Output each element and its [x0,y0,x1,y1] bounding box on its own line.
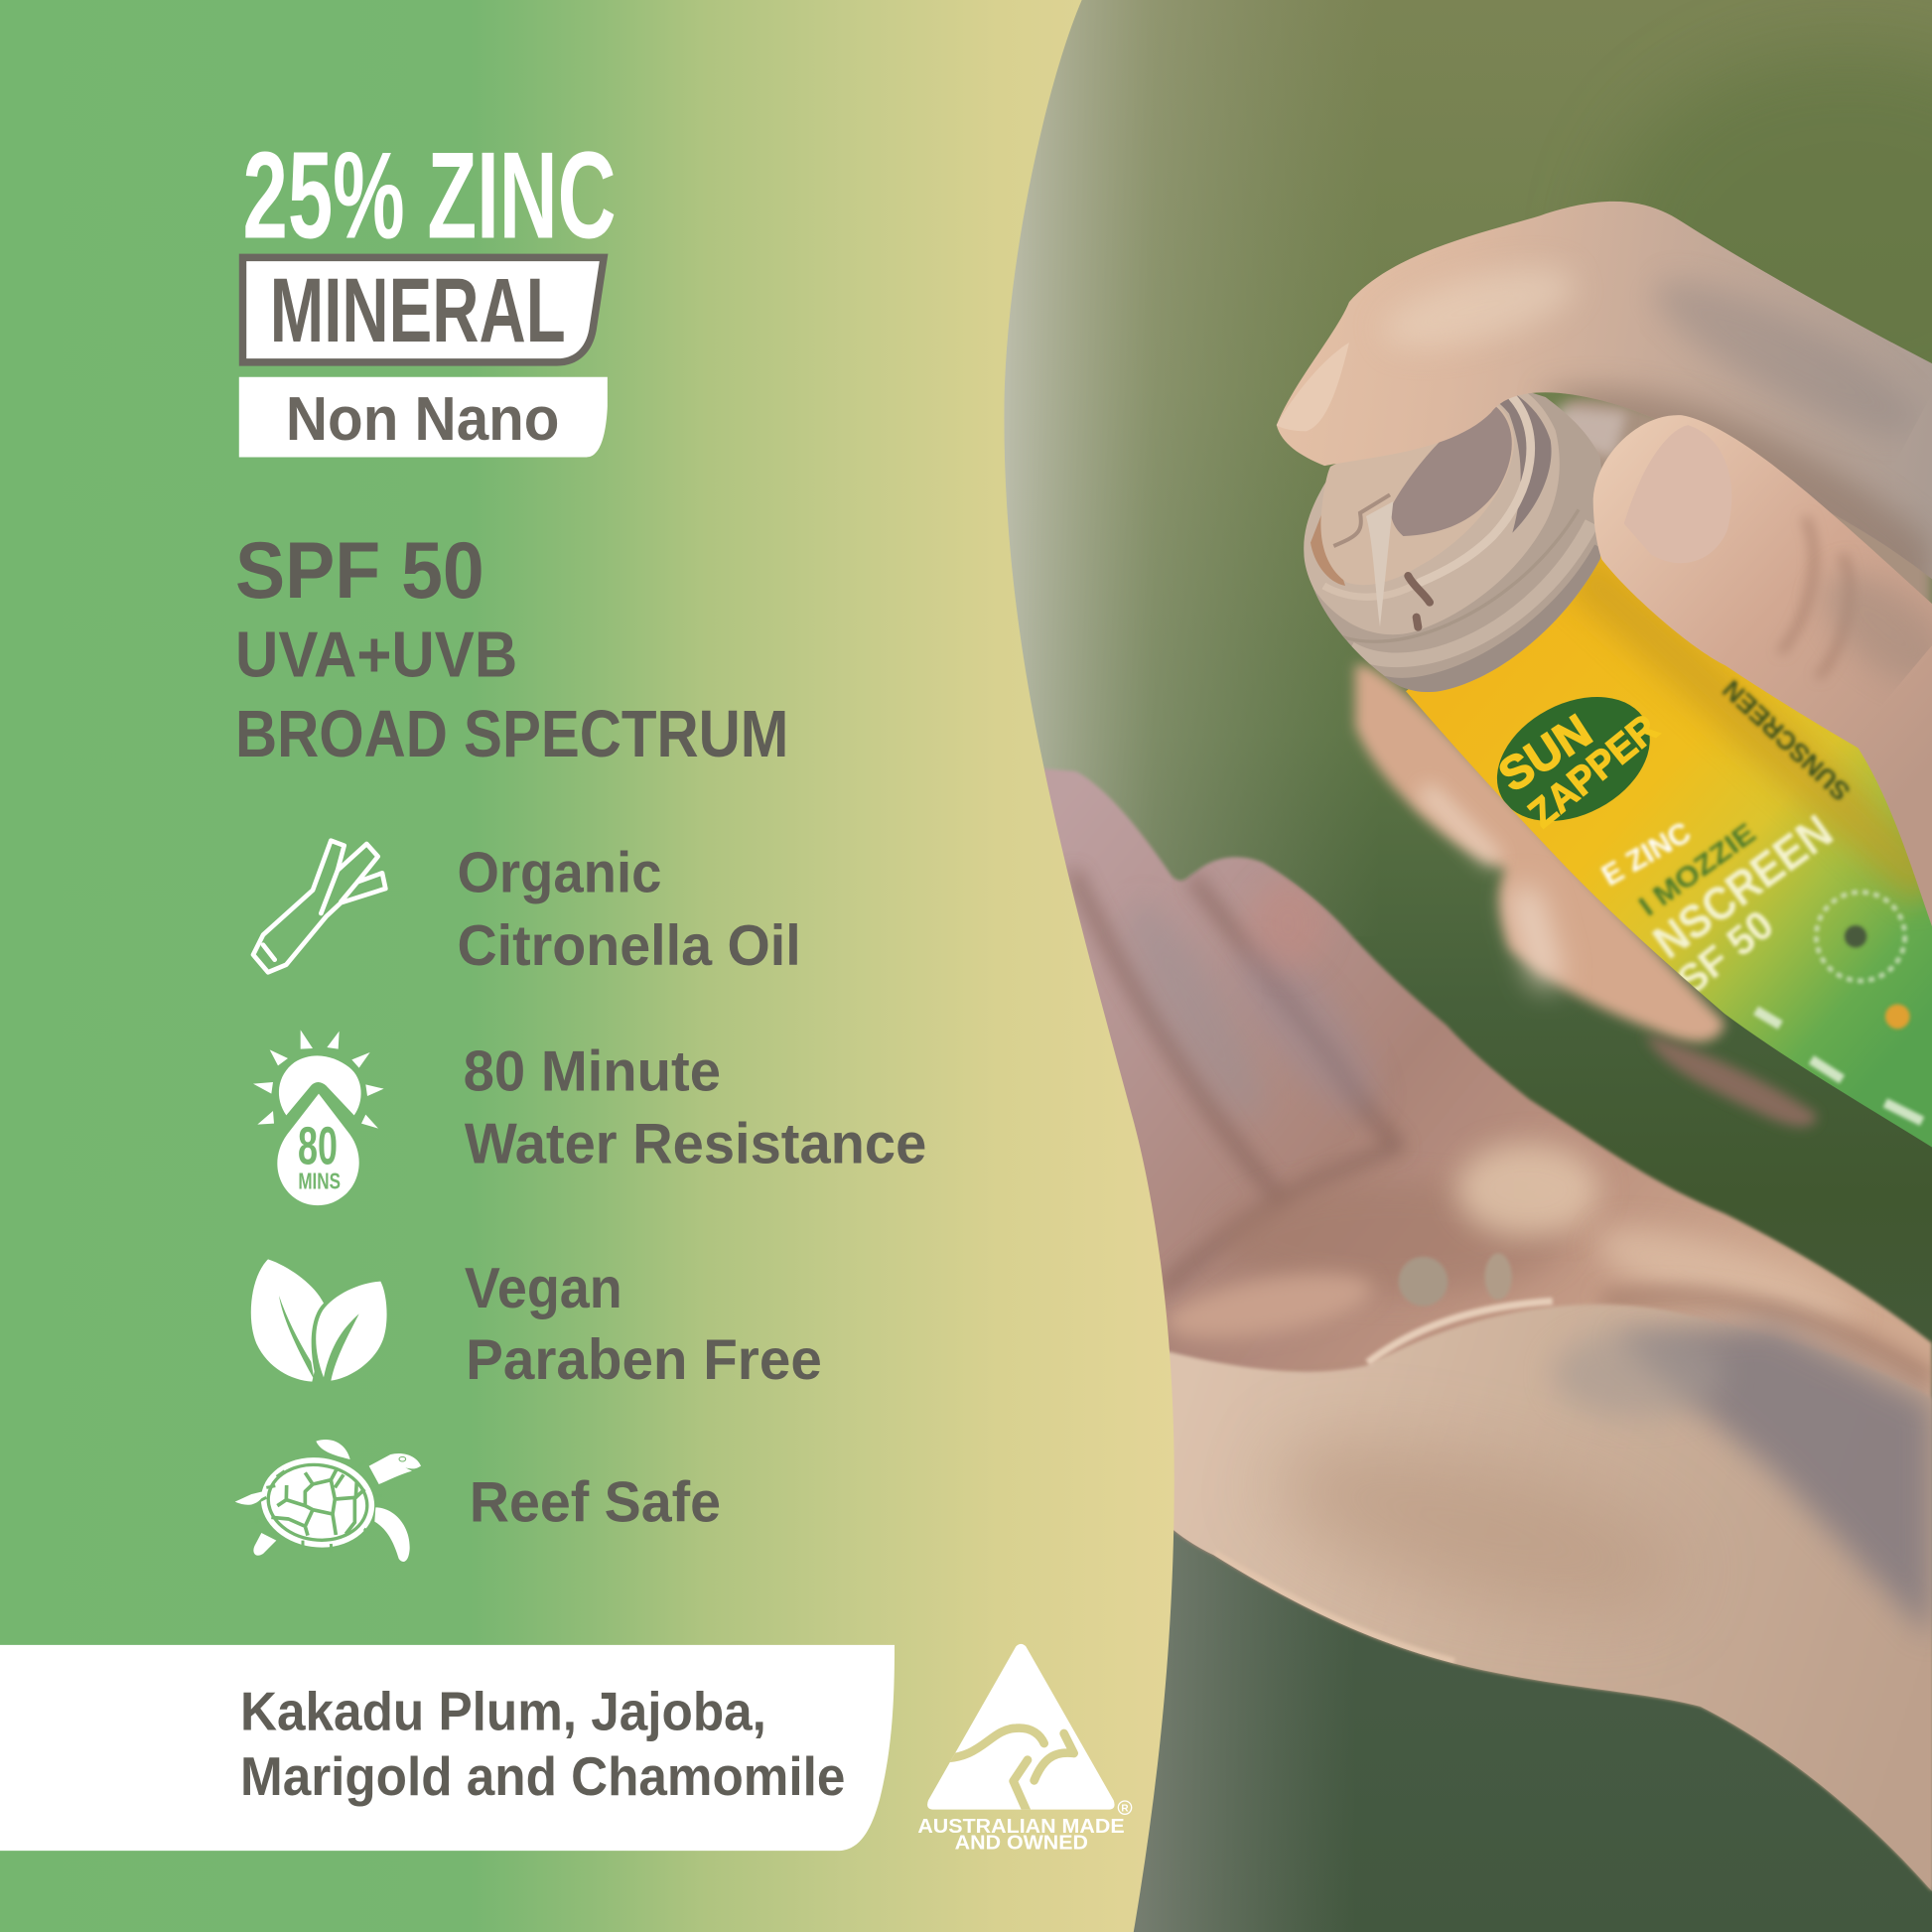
index finger [1277,202,1932,617]
heading: 25% ZINC: 25% ZINC [242,128,617,265]
lower open hand [986,763,1932,1932]
icon: sea turtle [235,1440,421,1562]
logo wording: R [1121,1804,1129,1815]
badge: MINERAL: MINERAL [270,260,566,361]
text: 80 Minute Water Resistance: 80 Minute [464,1039,721,1103]
icon: sun and water drop 80 mins [253,1030,384,1205]
icon: leaves [251,1259,387,1382]
text block: SPF 50: UVA+UVB [235,619,517,690]
logo: Sun Zapper: SUN [1489,704,1600,801]
holding hand: palm and back fingers [1355,397,1932,1127]
turtle head and flippers [369,1453,421,1484]
sunscreen blobs on palm [1399,1253,1512,1307]
text block: SPF 50: BROAD SPECTRUM [235,697,788,771]
thumb and wrist of lower hand [1159,1305,1932,1932]
bottle label text: SUNSCREEN [1717,674,1856,807]
text block: SPF 50: SPF 50 [235,526,484,616]
logo wording [917,1801,1132,1855]
text block: SPF 50 [235,526,788,771]
logo: Sun Zapper: ZAPPER [1521,706,1667,836]
finger shading [1249,959,1371,1110]
finger creases [1074,875,1399,1288]
badge: Non Nano [239,377,608,457]
panel: botanicals band: Marigold and Chamomile [240,1746,845,1807]
cap cavity [1472,382,1552,533]
kangaroo [940,1728,1074,1817]
badge: Non Nano: Non Nano [286,385,559,454]
mosquito badge [1756,893,1922,1121]
icon: sun and water drop 80 mins: 80 [298,1118,338,1176]
text: Organic Citronella Oil: Organic [457,842,661,905]
paste dome [1320,394,1514,585]
soft background haze [961,0,1932,1932]
bottle cap with paste [1304,380,1603,692]
panel: botanicals band [0,1645,895,1851]
bottle label text [1596,674,1856,1004]
text: Vegan Paraben Free: Paraben Free [466,1328,822,1392]
panel: curved gradient background [0,0,1174,1932]
text: Organic Citronella Oil [457,842,801,978]
thumbnail [1624,425,1731,563]
panel: photo of hands applying sunscreen [961,0,1932,1932]
photo background [961,0,1932,1932]
text: Reef Safe: Reef Safe [470,1471,721,1535]
palm [1253,1192,1559,1289]
panel: botanicals band: Kakadu Plum, Jajoba, [240,1681,766,1741]
text: Organic Citronella Oil: Citronella Oil [457,914,801,978]
text: Vegan Paraben Free [465,1257,822,1392]
cap lip [1304,380,1560,634]
cap bands [1330,509,1603,688]
bottle label text: E ZINC [1596,816,1697,893]
text: 80 Minute Water Resistance [464,1039,926,1176]
text: 80 Minute Water Resistance: Water Resistance [465,1113,926,1176]
icon: citronella stalk [253,841,385,972]
cap body [1311,380,1602,692]
bottle label text: I MOZZIE [1633,817,1761,922]
logo: Australian Made and Owned [917,1644,1132,1855]
icon: sun and water drop 80 mins: MINS [298,1168,341,1193]
sunscreen bottle [1406,536,1932,1147]
text: Vegan Paraben Free: Vegan [465,1257,622,1320]
logo triangle [927,1644,1115,1810]
thumb [1593,415,1932,926]
bottle label text: SF 50 [1668,901,1782,1004]
logo wording: AND OWNED [955,1832,1088,1855]
turtle shell [255,1450,380,1555]
logo wording: AUSTRALIAN MADE [917,1815,1125,1838]
bottle label text: NSCREEN [1643,804,1842,968]
index fingernail [1277,343,1349,431]
paste drip [1366,501,1393,627]
